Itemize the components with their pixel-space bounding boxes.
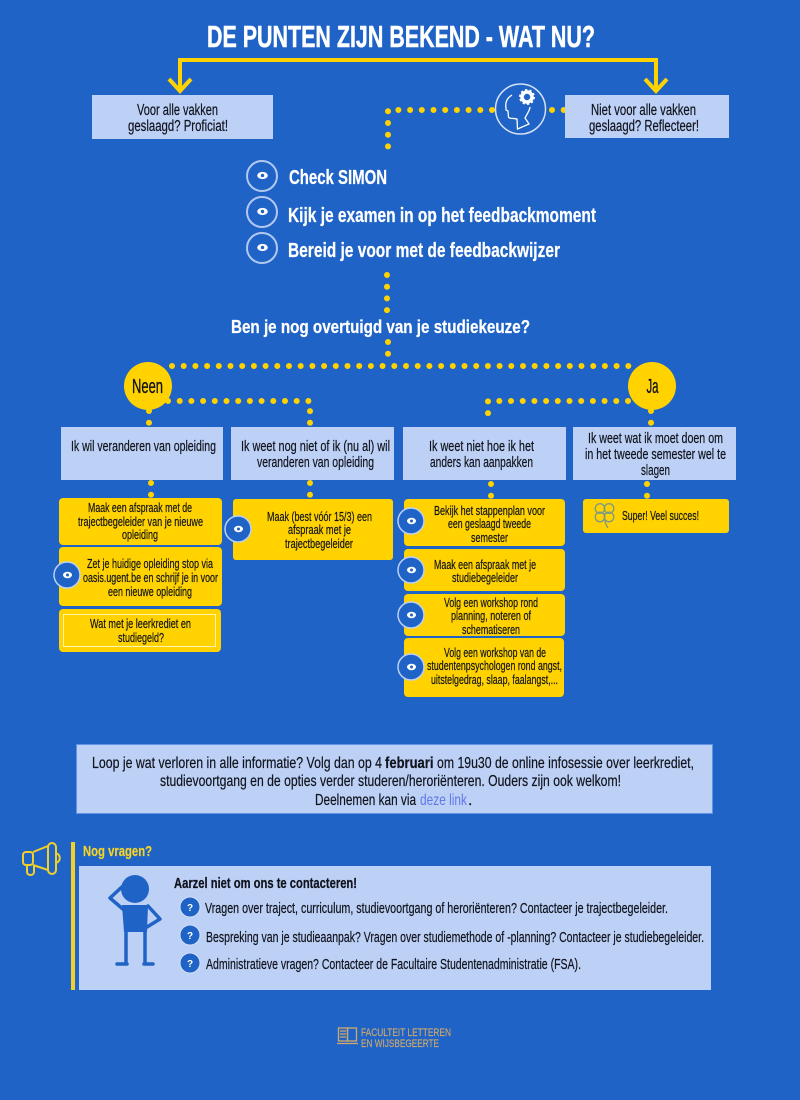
panel: different approach: Ik weet niet hoe ik het <box>429 438 535 455</box>
panel: online info session: februari <box>385 755 434 772</box>
panel: not all courses passed: geslaagd? Reflecteer! <box>589 118 699 135</box>
dotted connector: checklist to question <box>384 275 390 311</box>
panel: contact <box>79 866 711 990</box>
contact item: student administration <box>180 953 581 973</box>
panel: knows what to do: Ik weet wat ik moet doen om <box>588 430 723 447</box>
icon: eye badge <box>398 654 424 680</box>
contact item: student administration: Administratieve vragen? Contacteer de Facultaire Studentenadministratie (FSA). <box>206 957 581 973</box>
card: study credit and fees <box>59 609 221 652</box>
icon: thinking person <box>110 875 160 964</box>
panel: unsure about changing: veranderen van opleiding <box>257 454 374 471</box>
panel: online info session: . <box>468 792 472 809</box>
card: appointment trajectory counsellor new programme: opleiding <box>122 527 158 542</box>
card: step plan: Bekijk het stappenplan voor <box>434 503 545 518</box>
answer: neen <box>124 362 172 410</box>
card: study counsellor appointment: Maak een afspraak met je <box>434 557 536 572</box>
icon: eye <box>247 233 277 263</box>
card: stop current programme: oasis.ugent.be en schrijf je in voor <box>83 570 218 585</box>
icon: eye badge <box>54 562 80 588</box>
panel: knows what to do: slagen <box>641 462 670 479</box>
panel: online info session: Deelnemen kan via <box>315 792 416 809</box>
icon: open book <box>337 1028 358 1044</box>
icon: megaphone <box>23 843 60 875</box>
card: good luck <box>583 499 729 533</box>
card: planning workshop <box>398 594 565 637</box>
card: step plan <box>398 499 565 546</box>
card: student psychologists workshop: uitstelgedrag, slaap, faalangst,... <box>431 672 558 687</box>
text: contact heading: Aarzel niet om ons te contacteren! <box>174 876 357 892</box>
icon: eye badge <box>398 602 424 628</box>
panel: online info session <box>76 744 712 814</box>
card: planning workshop: Volg een workshop rond <box>444 595 538 610</box>
checklist <box>247 161 596 263</box>
panel: knows what to do <box>573 427 736 480</box>
panel: online info session: deze link <box>420 792 468 809</box>
card: planning workshop: schematiseren <box>462 622 520 637</box>
panel: not all courses passed <box>565 95 729 138</box>
panel: change programme <box>61 427 223 480</box>
arrow: split to both outcomes <box>169 60 667 91</box>
card: study credit and fees: Wat met je leerkrediet en <box>90 616 191 631</box>
panel: change programme: Ik wil veranderen van opleiding <box>71 438 216 455</box>
card: appointment trajectory counsellor: Maak (best vóór 15/3) een <box>267 509 372 524</box>
panel: online info session: studievoortgang en de opties verder studeren/heroriënteren. Ouders zijn ook welkom! <box>160 773 621 790</box>
panel: all courses passed <box>92 95 273 139</box>
card: appointment trajectory counsellor new programme <box>59 498 222 545</box>
card: planning workshop: planning, noteren of <box>451 608 531 623</box>
footer logo <box>337 1027 451 1050</box>
text: feedbackwijzer: Bereid je voor met de feedbackwijzer <box>288 240 560 262</box>
text: feedback moment: Kijk je examen in op het feedbackmoment <box>288 205 596 227</box>
panel: unsure about changing <box>231 427 394 480</box>
icon: eye <box>247 161 277 191</box>
panel: not all courses passed: Niet voor alle vakken <box>591 102 696 119</box>
card: good luck: Super! Veel succes! <box>622 508 699 523</box>
icon: eye badge <box>398 508 424 534</box>
heading: study choice question: Ben je nog overtuigd van je studiekeuze? <box>231 317 530 337</box>
icon: eye <box>247 197 277 227</box>
card: study counsellor appointment: studiebegeleider <box>452 570 518 585</box>
card: step plan: semester <box>471 530 508 545</box>
contact item: student administration: ? <box>187 959 193 970</box>
icon: head with gear <box>496 84 546 134</box>
contact item: study counsellor: ? <box>187 931 193 942</box>
icon: eye badge <box>225 516 251 542</box>
footer logo: EN WIJSBEGEERTE <box>361 1038 439 1050</box>
title: DE PUNTEN ZIJN BEKEND - WAT NU? <box>207 19 595 54</box>
card: student psychologists workshop: studentenpsychologen rond angst, <box>427 658 562 673</box>
card: student psychologists workshop <box>398 638 564 697</box>
panel: knows what to do: in het tweede semester wel te <box>585 446 726 463</box>
text: check simon: Check SIMON <box>289 167 387 189</box>
answer: ja <box>628 362 676 410</box>
card: study credit and fees: studiegeld? <box>118 630 164 645</box>
panel: all courses passed: Voor alle vakken <box>137 102 218 119</box>
answer: neen: Neen <box>132 376 163 398</box>
accent bar <box>71 842 75 990</box>
card: appointment trajectory counsellor: trajectbegeleider <box>285 536 353 551</box>
footer logo: FACULTEIT LETTEREN <box>361 1027 451 1039</box>
card: stop current programme: Zet je huidige opleiding stop via <box>87 556 214 571</box>
dotted connector: reflect to checklist <box>388 110 565 158</box>
card: study counsellor appointment <box>398 549 565 591</box>
card: appointment trajectory counsellor new programme: Maak een afspraak met de <box>88 500 192 515</box>
card: appointment trajectory counsellor new programme: trajectbegeleider van je nieuwe <box>78 514 203 529</box>
panel: online info session: Loop je wat verloren in alle informatie? Volg dan op 4 <box>92 755 382 772</box>
dotted connectors: question to answers <box>149 342 651 496</box>
contact item: trajectory counsellor: ? <box>187 903 193 914</box>
icon: clover <box>595 504 614 528</box>
card: student psychologists workshop: Volg een workshop van de <box>444 645 546 660</box>
card: stop current programme <box>54 547 222 606</box>
panel: online info session: om 19u30 de online infosessie over leerkrediet, <box>437 755 694 772</box>
panel: different approach: anders kan aanpakken <box>430 454 533 471</box>
panel: unsure about changing: Ik weet nog niet of ik (nu al) wil <box>241 438 390 455</box>
panel: all courses passed: geslaagd? Proficiat! <box>128 118 228 135</box>
card: appointment trajectory counsellor: afspraak met je <box>288 522 351 537</box>
card: step plan: een geslaagd tweede <box>448 516 531 531</box>
card: stop current programme: een nieuwe opleiding <box>108 584 192 599</box>
heading: nog vragen: Nog vragen? <box>83 843 152 860</box>
panel: different approach <box>403 427 566 480</box>
contact item: trajectory counsellor <box>180 897 668 917</box>
icon: eye badge <box>398 557 424 583</box>
card: appointment trajectory counsellor <box>225 499 393 560</box>
contact item: study counsellor <box>180 925 704 946</box>
answer: ja: Ja <box>646 376 659 398</box>
